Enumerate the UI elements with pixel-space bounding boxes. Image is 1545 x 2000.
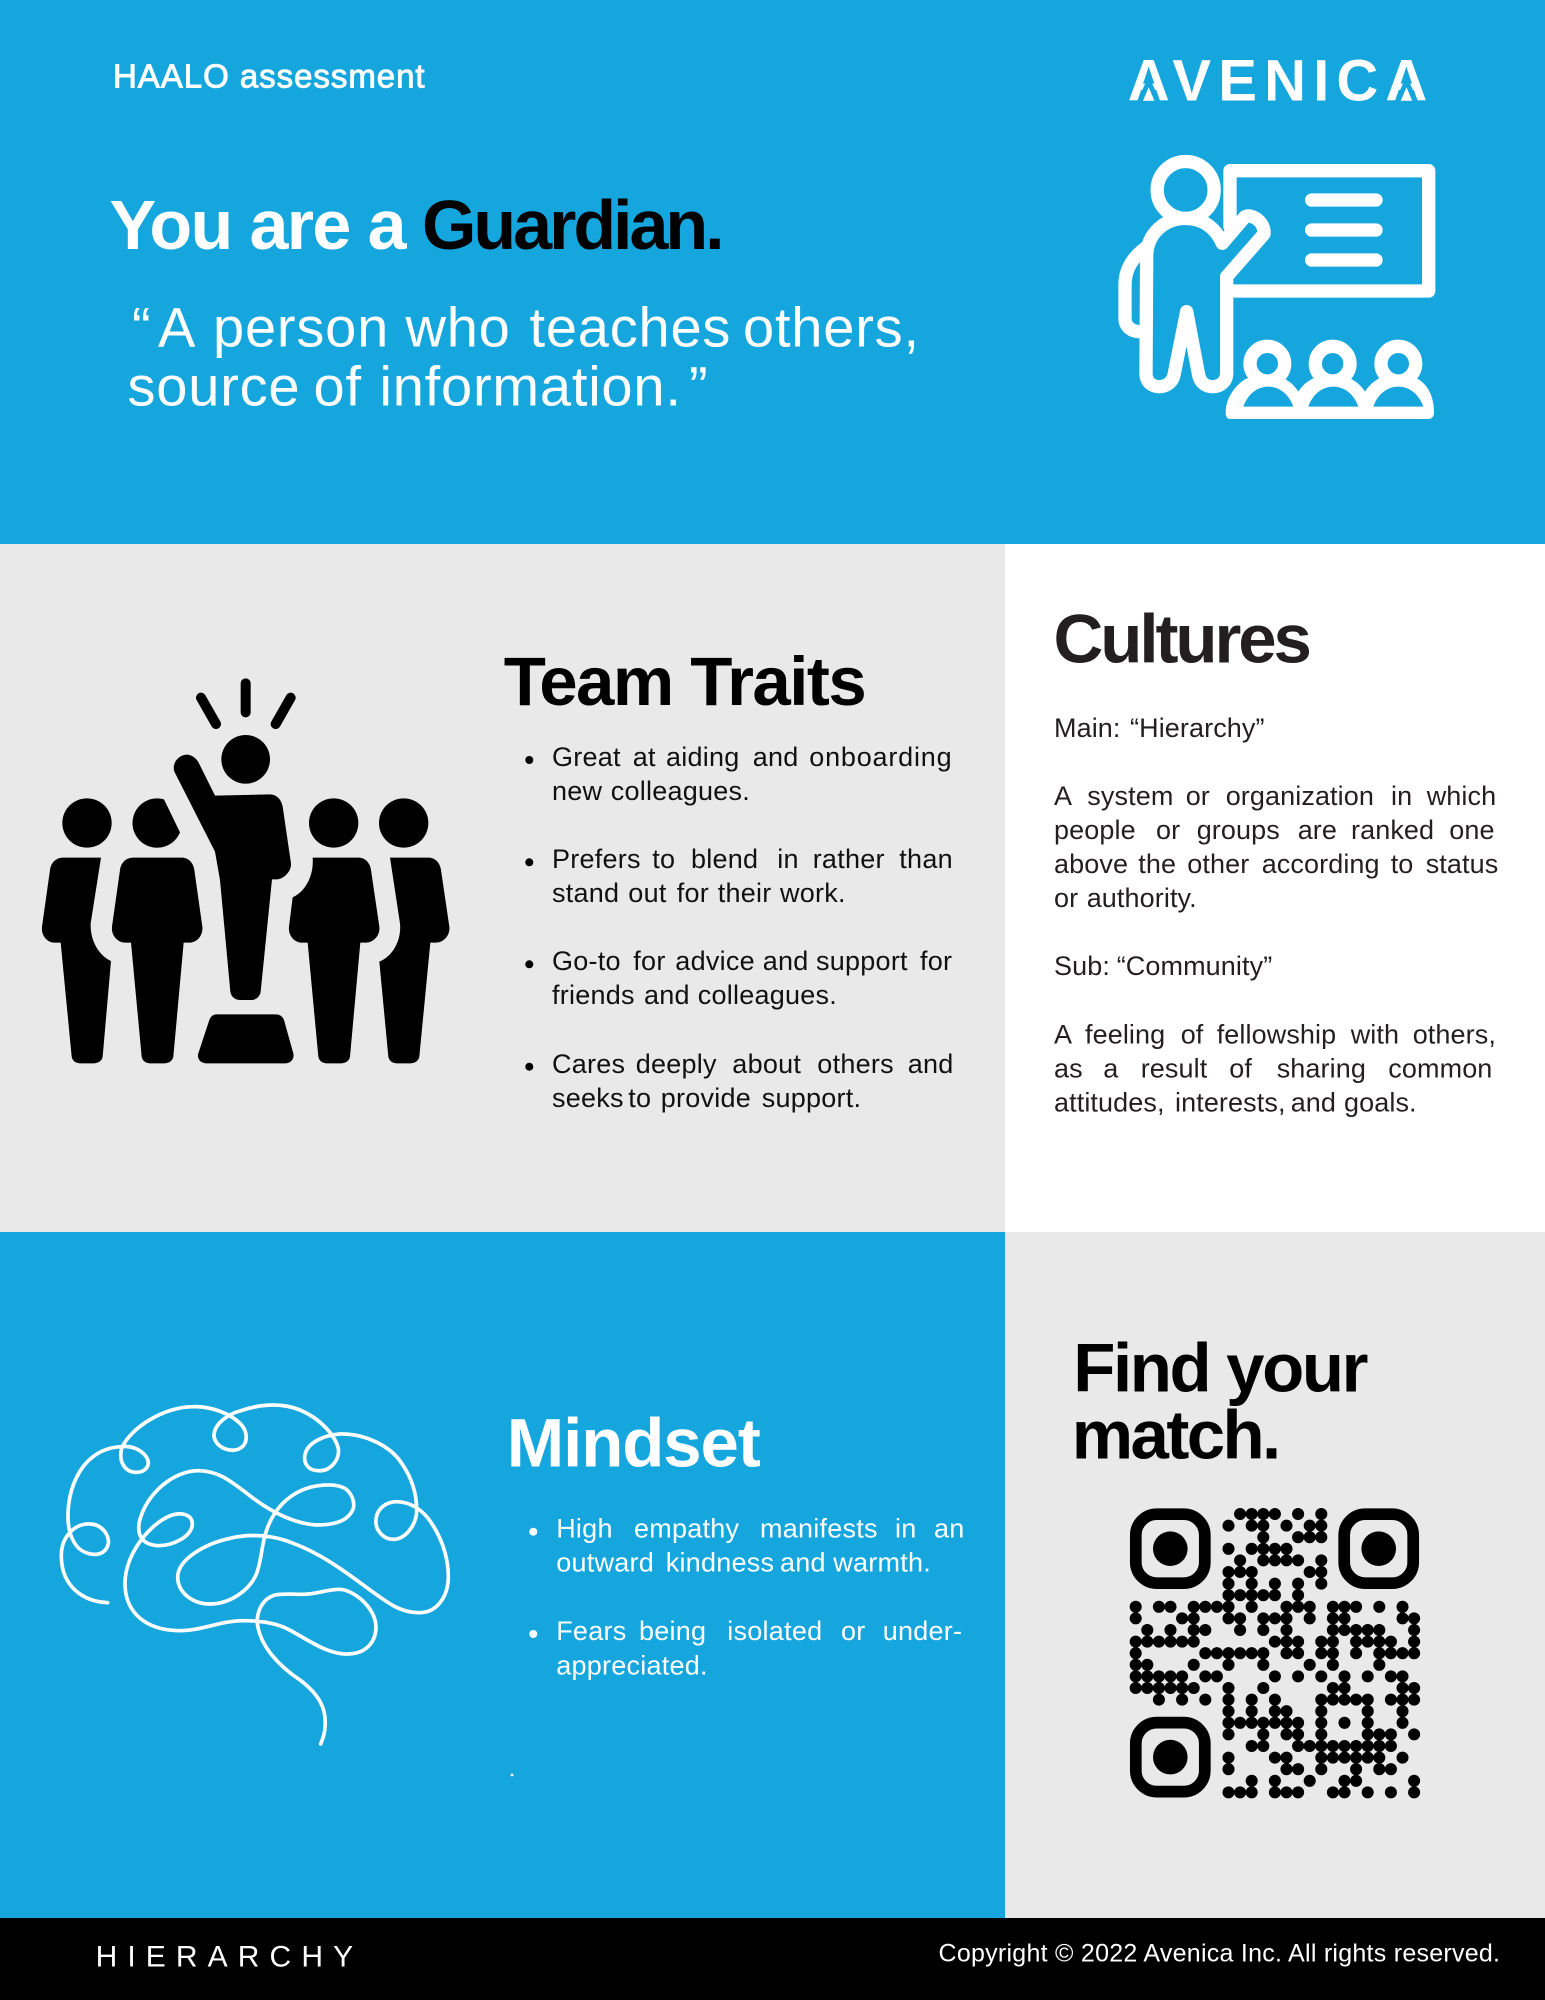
text: culture descriptions: organization — [1226, 781, 1374, 811]
text: culture descriptions: status — [1426, 849, 1498, 879]
panel: header — [0, 0, 1545, 544]
list: team traits: blend — [691, 844, 758, 874]
text: culture descriptions: “Community” — [1117, 951, 1272, 981]
text: culture descriptions: in — [1391, 781, 1412, 811]
list: mindset: manifests — [760, 1513, 878, 1543]
quote: A — [158, 296, 196, 359]
list: team traits: work. — [779, 878, 846, 908]
panel: footer — [0, 1918, 1545, 2000]
text: culture descriptions: interests, — [1175, 1088, 1286, 1118]
quote: others, — [743, 296, 920, 359]
heading: cultures: Cultures — [1054, 601, 1312, 678]
text: culture descriptions: sharing — [1277, 1054, 1366, 1084]
list: mindset: outward — [556, 1548, 654, 1578]
list: team traits: Great — [552, 742, 621, 772]
text: culture descriptions: feeling — [1085, 1020, 1165, 1050]
list: team traits: support. — [762, 1083, 861, 1113]
quote — [128, 296, 920, 418]
list: team traits: Go-to — [552, 946, 621, 976]
quote: information. — [380, 355, 682, 418]
title: You are a — [110, 186, 408, 264]
list: team traits: out — [628, 878, 667, 908]
assessment label: HAALO assessment — [113, 58, 425, 95]
list: mindset: empathy — [634, 1513, 740, 1543]
text: culture descriptions: A — [1054, 781, 1072, 811]
list: team traits: for — [633, 946, 666, 976]
QR code — [1136, 1514, 1414, 1792]
text: culture descriptions: the — [1138, 849, 1176, 879]
text: culture descriptions: a — [1103, 1054, 1119, 1084]
list: team traits: onboarding — [809, 742, 952, 772]
text: culture descriptions: fellowship — [1217, 1020, 1336, 1050]
icon: teacher at board with students — [1125, 161, 1434, 419]
copyright: Copyright © 2022 Avenica Inc. All rights reserved. — [938, 1940, 1500, 1968]
list: team traits: than — [899, 844, 953, 874]
list: team traits: others — [817, 1049, 894, 1079]
text: culture descriptions: result — [1141, 1054, 1208, 1084]
list: team traits: and — [763, 946, 809, 976]
list: team traits: and — [753, 742, 799, 772]
list: team traits: support — [816, 946, 908, 976]
quote: person — [213, 296, 389, 359]
list: mindset: appreciated. — [556, 1650, 708, 1680]
text: culture descriptions: or — [1054, 883, 1078, 913]
list: team traits: and — [644, 980, 690, 1010]
list: team traits: to — [652, 844, 675, 874]
list: mindset: in — [895, 1513, 917, 1543]
text: culture descriptions: with — [1350, 1020, 1399, 1050]
list: team traits: at — [633, 742, 656, 772]
text: culture descriptions: which — [1426, 781, 1496, 811]
list: team traits: for — [677, 878, 709, 908]
quote: source — [128, 355, 300, 418]
text: culture descriptions: authority. — [1087, 883, 1197, 913]
list: team traits: aiding — [666, 742, 740, 772]
logo: Avenica: AVENICA — [1128, 49, 1427, 114]
text: culture descriptions: groups — [1197, 815, 1280, 845]
list: team traits: stand — [552, 878, 619, 908]
list: team traits: seeks — [552, 1083, 624, 1113]
heading: team traits: Team Traits — [504, 643, 867, 720]
quote: “ — [132, 296, 151, 359]
footer culture label: HIERARCHY — [96, 1940, 353, 1974]
list: team traits — [525, 742, 954, 1113]
list: team traits: colleagues. — [698, 980, 837, 1010]
list: mindset: under- — [883, 1616, 962, 1646]
text: culture descriptions: attitudes, — [1054, 1088, 1165, 1118]
list: mindset: Fears — [556, 1616, 626, 1646]
list: team traits: to — [628, 1083, 651, 1113]
list: mindset: kindness — [666, 1548, 774, 1578]
heading: find your match: Find your — [1073, 1330, 1368, 1407]
quote: of — [314, 355, 362, 418]
text: culture descriptions: Sub: — [1054, 951, 1110, 981]
text: culture descriptions: of — [1229, 1054, 1252, 1084]
list: team traits: deeply — [636, 1049, 717, 1079]
text: culture descriptions: others, — [1413, 1020, 1496, 1050]
list: team traits: Cares — [552, 1049, 625, 1079]
list: mindset: warmth. — [832, 1548, 931, 1578]
list: mindset: and — [780, 1548, 826, 1578]
title: Guardian. — [422, 186, 725, 264]
text: culture descriptions: above — [1054, 849, 1128, 879]
text: culture descriptions: other — [1187, 849, 1249, 879]
list: team traits: their — [718, 878, 771, 908]
list: mindset: or — [841, 1616, 866, 1646]
text: culture descriptions: or — [1186, 781, 1210, 811]
heading: mindset: Mindset — [507, 1405, 761, 1482]
panel: find your match — [1005, 1232, 1545, 1918]
text: culture descriptions: people — [1054, 815, 1136, 845]
icon: line-art brain — [61, 1405, 448, 1744]
text: culture descriptions: system — [1087, 781, 1173, 811]
text: culture descriptions: goals. — [1344, 1088, 1417, 1118]
panel: mindset — [0, 1232, 1005, 1918]
list: team traits: provide — [661, 1083, 751, 1113]
text: culture descriptions: A — [1054, 1020, 1072, 1050]
list: mindset: isolated — [727, 1616, 822, 1646]
list: team traits: Prefers — [552, 844, 641, 874]
list: team traits: advice — [675, 946, 755, 976]
text: culture descriptions: to — [1391, 849, 1413, 879]
icon: crowd with standout leader — [42, 683, 449, 1063]
text: culture descriptions: or — [1156, 815, 1180, 845]
list: team traits: in — [777, 844, 799, 874]
title — [110, 186, 725, 264]
list: team traits: new — [552, 776, 603, 806]
text: culture descriptions — [1054, 713, 1498, 1118]
quote: who — [404, 296, 511, 359]
list: mindset: being — [639, 1616, 706, 1646]
list: team traits: colleagues. — [611, 776, 750, 806]
quote: teaches — [530, 296, 731, 359]
text: culture descriptions: of — [1181, 1020, 1204, 1050]
heading: find your match — [1072, 1330, 1368, 1473]
text: culture descriptions: one — [1449, 815, 1495, 845]
panel: team traits — [0, 544, 1005, 1232]
list: team traits: for — [920, 946, 952, 976]
list: team traits: and — [908, 1049, 954, 1079]
text: culture descriptions: common — [1388, 1054, 1492, 1084]
heading: find your match: match. — [1072, 1396, 1281, 1473]
list: mindset — [511, 1513, 965, 1776]
text: culture descriptions: according — [1262, 849, 1380, 879]
quote: ” — [689, 355, 708, 418]
list: team traits: about — [732, 1049, 801, 1079]
text: culture descriptions: Main: — [1054, 713, 1121, 743]
panel: cultures — [1005, 544, 1545, 1232]
text: culture descriptions: are — [1298, 815, 1337, 845]
list: mindset: an — [934, 1513, 965, 1543]
text: culture descriptions: ranked — [1351, 815, 1434, 845]
list: team traits: rather — [813, 844, 885, 874]
list: team traits: friends — [552, 980, 635, 1010]
text: culture descriptions: as — [1054, 1054, 1083, 1084]
text: culture descriptions: and — [1291, 1088, 1336, 1118]
text: culture descriptions: “Hierarchy” — [1130, 713, 1265, 743]
list: mindset: High — [556, 1513, 613, 1543]
